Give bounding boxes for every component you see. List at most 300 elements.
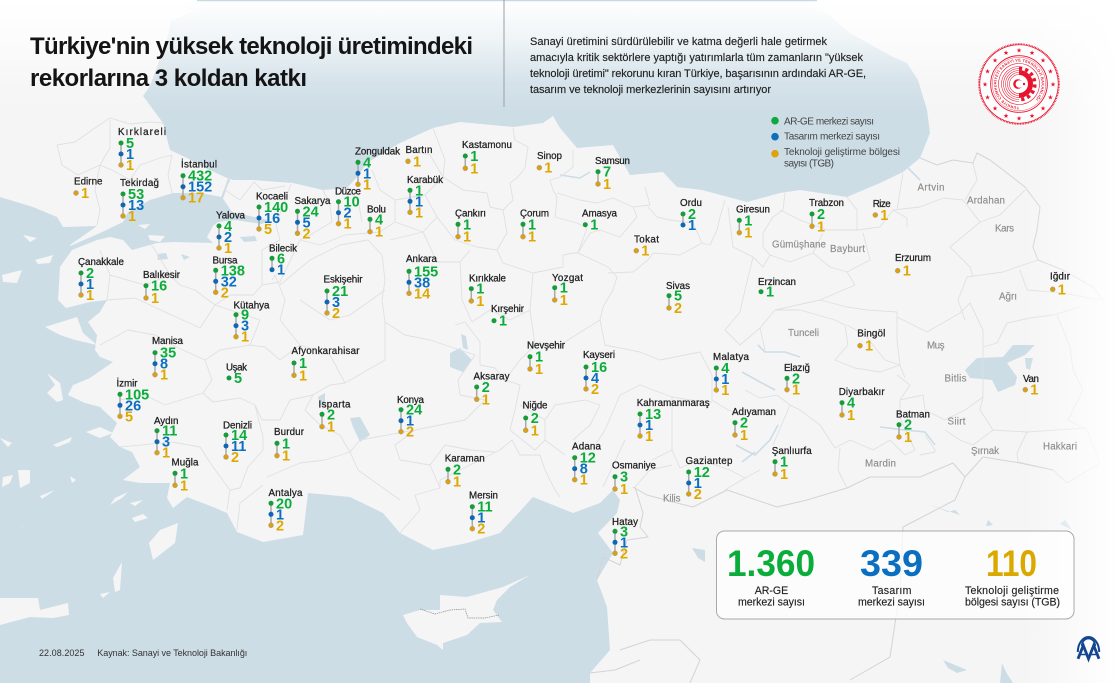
province: Burdur: 1 — [282, 436, 290, 452]
province: Bilecik: Bilecik — [269, 244, 297, 254]
province: Samsun: Samsun — [595, 156, 630, 167]
legend: AR-GE merkezi sayısı — [784, 116, 874, 128]
province: Tokat: Tokat — [634, 234, 659, 246]
title: Türkiye'nin yüksek teknoloji üretimindeki — [30, 33, 473, 60]
intro text: Sanayi üretimini sürdürülebilir ve katma değerli hale getirmek — [530, 36, 828, 48]
province: Karabük — [407, 175, 443, 221]
total: TGB — [965, 543, 1060, 608]
province: Isparta: 1 — [327, 420, 335, 436]
province: Hatay: 1 — [620, 535, 628, 551]
ministry seal: ★ — [1029, 49, 1035, 57]
province: Zonguldak: 4 — [363, 155, 371, 171]
province: Balıkesir: Balıkesir — [143, 270, 181, 281]
province: Trabzon — [809, 198, 844, 235]
province: Kahramanmaraş: 1 — [645, 429, 653, 445]
province: Aydın — [154, 416, 178, 462]
province: Yalova: Yalova — [216, 210, 246, 222]
province: İzmir: 26 — [125, 398, 141, 414]
province: Karabük: 1 — [415, 194, 423, 210]
total: AR-GE: AR-GE — [755, 585, 788, 597]
province: Kırklareli: 5 — [126, 136, 134, 152]
province: Eskişehir: 21 — [332, 284, 348, 300]
province: İzmir: 105 — [125, 387, 149, 403]
province: Rize — [873, 199, 891, 224]
province: Osmaniye: Osmaniye — [612, 460, 657, 472]
province: Düzce: 1 — [344, 217, 352, 233]
province: Samsun: 1 — [603, 177, 611, 193]
province: Tekirdağ: Tekirdağ — [120, 178, 159, 189]
province: Zonguldak — [355, 146, 400, 193]
province: Eskişehir: 3 — [332, 295, 340, 311]
date and source: Kaynak: Sanayi ve Teknoloji Bakanlığı — [97, 648, 247, 658]
ministry seal: ★ — [992, 56, 998, 64]
province: Şanlıurfa: 1 — [780, 455, 788, 471]
province: Edirne: Edirne — [74, 176, 103, 188]
legend: sayısı (TGB) — [784, 158, 834, 170]
province: Erzurum: Erzurum — [895, 253, 931, 264]
province: Kocaeli: 16 — [264, 211, 280, 227]
province: Kocaeli: Kocaeli — [256, 192, 288, 202]
province: Muğla: Muğla — [172, 458, 199, 468]
province: Kahramanmaraş: Kahramanmaraş — [637, 398, 710, 409]
province: Tokat: 1 — [641, 244, 649, 260]
province: Bursa: 2 — [221, 285, 229, 301]
total: AR-GE — [727, 543, 815, 608]
province: Kütahya: 3 — [241, 319, 249, 335]
province: Uşak: 5 — [234, 371, 242, 387]
province: Sakarya: 5 — [302, 215, 311, 231]
legend: Teknoloji geliştirme bölgesi — [784, 147, 900, 158]
province: Konya: Konya — [397, 395, 425, 406]
province: Samsun: 7 — [603, 165, 611, 181]
province: Adana: 1 — [580, 473, 588, 489]
province: Elazığ: Elazığ — [784, 363, 810, 374]
province: Tekirdağ: 1 — [128, 209, 136, 225]
province: Afyonkarahisar — [292, 346, 360, 384]
province: Uşak — [226, 362, 247, 387]
legend: Tasarım merkezi sayısı — [784, 132, 880, 142]
province: Elazığ — [784, 363, 810, 399]
province: Denizli: 2 — [231, 450, 239, 466]
province: Ankara: 14 — [414, 286, 430, 302]
province: Iğdır: Iğdır — [1050, 272, 1071, 282]
province: Çanakkale: 1 — [86, 277, 94, 293]
province: Kahramanmaraş — [637, 398, 710, 445]
province: Yalova: 2 — [224, 230, 232, 246]
province: Çorum: Çorum — [520, 208, 549, 220]
intro text: tasarım ve teknoloji merkezlerinin sayısını artırıyor — [530, 84, 771, 96]
province: Kocaeli: 5 — [264, 222, 272, 238]
total: AR-GE: merkezi sayısı — [738, 596, 805, 608]
ministry seal: ★ — [1047, 94, 1053, 102]
province: Bilecik: 1 — [277, 263, 285, 279]
province: Bursa: 32 — [221, 274, 237, 290]
province: İstanbul — [180, 160, 217, 207]
province: Bilecik: 6 — [277, 251, 285, 267]
province: Kahramanmaraş: 13 — [645, 407, 661, 423]
ministry seal: ★ — [985, 68, 991, 76]
province: Zonguldak: Zonguldak — [355, 146, 400, 158]
province: Edirne — [74, 176, 103, 202]
province: Iğdır — [1050, 272, 1071, 298]
province: Kayseri: 2 — [591, 382, 599, 398]
province: Ankara: 155 — [414, 264, 438, 280]
province: Çankırı — [455, 208, 486, 246]
icon: AA logo — [1078, 637, 1099, 659]
province: Düzce: 10 — [344, 195, 360, 211]
provinces without data: Kars — [995, 224, 1014, 234]
province: Konya: 1 — [406, 414, 414, 430]
province: Manisa — [152, 336, 184, 384]
province: Osmaniye: 3 — [620, 470, 628, 486]
province: Nevşehir — [527, 340, 566, 378]
province: Bolu: 4 — [375, 212, 383, 228]
province: Zonguldak: 1 — [363, 177, 371, 193]
province: Bursa — [212, 256, 245, 301]
lakes and rivers — [157, 236, 1072, 683]
province: Sakarya: 24 — [302, 204, 319, 220]
total: Tasarım: merkezi sayısı — [858, 596, 925, 608]
province: Karabük: Karabük — [407, 175, 443, 186]
title — [30, 33, 473, 92]
province: Mersin: 1 — [477, 511, 485, 527]
province: Hatay: 2 — [620, 546, 628, 562]
province: Kütahya: 1 — [241, 330, 249, 346]
province: Çanakkale — [78, 257, 125, 304]
province: Kayseri — [583, 350, 615, 398]
province: Mersin — [469, 490, 498, 538]
province: Balıkesir — [143, 270, 181, 307]
provinces without data: Hakkari — [1043, 442, 1077, 452]
ministry seal: ★ — [1003, 49, 1009, 57]
province: Ankara — [406, 254, 438, 302]
province: Karaman: Karaman — [445, 454, 485, 464]
province: Antalya: 20 — [276, 496, 292, 512]
province: Balıkesir: 16 — [151, 279, 167, 295]
province: Bolu — [367, 204, 386, 241]
provinces without data: Şırnak — [971, 446, 999, 457]
province: Kastamonu — [462, 140, 512, 177]
province: Erzurum: 1 — [903, 264, 911, 280]
total: TGB: Teknoloji geliştirme — [965, 585, 1059, 597]
province: Ordu: 2 — [688, 207, 696, 223]
province: Batman — [896, 410, 930, 446]
province: Bolu: 1 — [375, 225, 383, 241]
province: Antalya — [268, 488, 303, 534]
province: Yozgat: 1 — [560, 281, 568, 297]
province: Amasya: 1 — [590, 218, 598, 234]
province: Malatya: 1 — [721, 372, 729, 388]
province: Yalova: 4 — [224, 219, 232, 235]
province: Eskişehir: Eskişehir — [324, 274, 363, 286]
province: Amasya — [582, 208, 618, 234]
province: Erzincan — [758, 277, 796, 301]
province: Elazığ: 1 — [792, 383, 800, 399]
province: Kayseri: 16 — [591, 360, 607, 376]
province: Karaman: 1 — [453, 475, 461, 491]
province: İstanbul: İstanbul — [181, 160, 217, 170]
total: Tasarım: Tasarım — [872, 585, 912, 597]
province: Eskişehir: 2 — [332, 306, 340, 322]
province: Afyonkarahisar: 1 — [299, 356, 307, 372]
header divider — [503, 0, 505, 107]
province: Bingöl — [857, 328, 885, 355]
province: Bursa: 138 — [221, 263, 245, 279]
province: Nevşehir: 1 — [535, 350, 543, 366]
province: Bartın: 1 — [413, 154, 421, 170]
islands — [0, 224, 530, 650]
title: rekorlarına 3 koldan katkı — [30, 65, 307, 92]
province: Kütahya: 9 — [241, 308, 249, 324]
province: Adana: 12 — [580, 451, 596, 467]
province: Düzce — [335, 186, 362, 233]
province: Ordu — [680, 198, 702, 234]
province: Elazığ: 2 — [792, 371, 800, 387]
provinces without data: Bayburt — [830, 244, 865, 255]
province: Mersin: 11 — [477, 500, 493, 516]
province: Aydın: 1 — [162, 446, 170, 462]
province: Çankırı: Çankırı — [455, 208, 486, 220]
province: Ordu: 1 — [688, 218, 696, 234]
province: Gaziantep: 1 — [694, 476, 702, 492]
province: Kocaeli — [256, 192, 288, 238]
provinces without data: Mardin — [865, 458, 896, 470]
province: Afyonkarahisar: 1 — [299, 368, 307, 384]
provinces without data: Tunceli — [788, 328, 819, 339]
province: Muğla: 1 — [180, 466, 188, 482]
province: Trabzon: 2 — [817, 207, 825, 223]
province: Sivas: 2 — [674, 301, 682, 317]
ministry seal: ★ — [982, 80, 988, 88]
province: Aydın: 11 — [162, 424, 177, 440]
province: Sivas — [666, 281, 690, 317]
province: Yalova — [216, 210, 246, 257]
ministry seal: ★ — [985, 94, 991, 102]
province: Bolu: Bolu — [367, 204, 386, 216]
province: Malatya — [713, 352, 750, 399]
province: Kastamonu: 1 — [470, 161, 478, 177]
province: Burdur: Burdur — [274, 427, 305, 438]
province: Sivas: Sivas — [666, 281, 690, 292]
province: İzmir — [116, 378, 149, 425]
province: Düzce: 2 — [344, 206, 352, 222]
province: Van — [1023, 374, 1039, 399]
province: Sakarya: Sakarya — [294, 196, 331, 207]
province: Kırklareli: Kırklareli — [118, 127, 166, 138]
province: Manisa: Manisa — [152, 336, 184, 347]
ministry seal — [978, 43, 1060, 125]
province: Ankara: 38 — [414, 275, 430, 291]
totals panel — [716, 531, 1074, 619]
province: Denizli: Denizli — [223, 420, 252, 432]
province: Isparta — [318, 400, 351, 436]
province: Sinop: Sinop — [537, 151, 563, 162]
province: Gaziantep: Gaziantep — [686, 456, 733, 467]
province: Kırıkkale: 1 — [476, 282, 484, 298]
province: Kırıkkale: 1 — [476, 294, 484, 310]
province: Kütahya — [234, 300, 270, 346]
province: Yozgat: Yozgat — [552, 273, 583, 284]
province: Osmaniye: 1 — [620, 482, 628, 498]
total: TGB: 110 — [986, 543, 1037, 584]
province: Amasya: Amasya — [582, 208, 618, 220]
province: Niğde: 2 — [531, 411, 539, 427]
province: Muğla — [172, 458, 199, 494]
province: Gaziantep: 2 — [694, 487, 702, 503]
province: Samsun — [595, 156, 630, 193]
provinces without data — [663, 182, 1077, 504]
province: Isparta: Isparta — [318, 400, 351, 410]
province: İstanbul: 432 — [188, 169, 212, 185]
province: Malatya: Malatya — [713, 352, 750, 363]
province: Tekirdağ — [120, 178, 159, 225]
province: Aksaray: 1 — [482, 392, 490, 408]
province: Yozgat: 1 — [560, 293, 568, 309]
province: Antalya: 1 — [276, 507, 284, 523]
sea: Aegean and Mediterranean — [0, 197, 620, 683]
province and country borders — [57, 118, 1100, 533]
province: Giresun: 1 — [744, 213, 752, 229]
province: Burdur — [274, 427, 305, 465]
province: Şanlıurfa: Şanlıurfa — [772, 446, 812, 457]
province: Diyarbakır: Diyarbakır — [839, 387, 885, 398]
sea: Marmara — [68, 193, 268, 250]
province: Mersin: Mersin — [469, 490, 498, 502]
province: Hatay: 3 — [620, 524, 628, 540]
province: Hatay: Hatay — [612, 517, 638, 528]
province: Konya: 2 — [406, 425, 414, 441]
province: Yozgat — [552, 273, 583, 309]
sea: Black Sea — [143, 0, 930, 202]
province: Trabzon: 1 — [817, 219, 825, 235]
province: Karaman: 2 — [453, 462, 461, 478]
ministry seal: TÜRKİYE CUMHURİYETİ SANAYİ VE TEKNOLOJİ BAKANLIĞI — [994, 58, 1044, 110]
province: İzmir: İzmir — [116, 378, 138, 390]
province: Kahramanmaraş: 1 — [645, 418, 653, 434]
province: Aksaray: 2 — [482, 380, 490, 396]
province: Niğde: 1 — [531, 423, 539, 439]
province: Bartın — [406, 145, 432, 170]
province: Mersin: 2 — [477, 522, 485, 538]
province: Kastamonu: 1 — [470, 149, 478, 165]
provinces without data: Bitlis — [944, 374, 967, 384]
province: Niğde — [522, 400, 548, 439]
province: Uşak: Uşak — [226, 362, 247, 374]
provinces without data: Siirt — [948, 416, 966, 428]
provinces without data: Artvin — [918, 182, 944, 194]
province: Manisa: 1 — [160, 368, 168, 384]
province: Ordu: Ordu — [680, 198, 702, 209]
provinces without data: Ağrı — [999, 292, 1017, 302]
province: Çanakkale: 2 — [86, 266, 94, 282]
province: Çorum — [520, 208, 549, 246]
province: Aksaray — [474, 372, 510, 408]
province: Sakarya: 2 — [302, 226, 311, 242]
ministry seal: ★ — [1040, 56, 1046, 64]
province: Diyarbakır: 1 — [847, 408, 855, 424]
province: Nevşehir: Nevşehir — [527, 340, 566, 352]
ministry seal: ★ — [1016, 46, 1022, 54]
province: Kırşehir — [491, 304, 525, 330]
province: İstanbul: 152 — [188, 180, 212, 196]
province: Çankırı: 1 — [463, 230, 471, 246]
province: Karaman — [445, 454, 485, 491]
province: Aydın: 3 — [162, 435, 170, 451]
province: Hatay — [612, 517, 638, 562]
province: Düzce: Düzce — [335, 186, 362, 198]
province: Çanakkale: Çanakkale — [78, 257, 125, 268]
province: Tekirdağ: 13 — [128, 198, 144, 214]
province: Karabük: 1 — [415, 205, 423, 221]
province: Bilecik — [269, 244, 297, 279]
province: Konya — [397, 395, 425, 441]
province: Balıkesir: 1 — [151, 291, 159, 307]
province: Muğla: 1 — [180, 478, 188, 494]
ministry seal: ★ — [1047, 68, 1053, 76]
province: Sakarya — [294, 196, 331, 242]
province: Batman: Batman — [896, 410, 930, 420]
province: Osmaniye — [612, 460, 657, 498]
province: Gaziantep — [686, 456, 733, 503]
intro text: amacıyla kritik sektörlere yaptığı yatırımlarla tüm zamanların "yüksek — [530, 52, 864, 64]
province: Isparta: 2 — [327, 407, 335, 423]
province: Erzincan: Erzincan — [758, 277, 796, 288]
province: Burdur: 1 — [282, 449, 290, 465]
province: Van: 1 — [1030, 383, 1038, 399]
province: Giresun: 1 — [744, 226, 752, 242]
province: Giresun — [736, 204, 770, 242]
province: Konya: 24 — [406, 403, 422, 419]
province: Çankırı: 1 — [463, 217, 471, 233]
province: Kırıkkale — [469, 274, 507, 310]
province: Denizli: 11 — [231, 439, 246, 455]
ministry seal: ★ — [992, 104, 998, 112]
province: Bursa: Bursa — [212, 256, 238, 266]
top and right white fades — [0, 0, 1120, 112]
province: Batman: 2 — [904, 418, 912, 434]
intro text — [530, 36, 866, 96]
total: TGB: bölgesi sayısı (TGB) — [965, 596, 1060, 608]
province: Karabük: 1 — [415, 183, 423, 199]
province: Afyonkarahisar: Afyonkarahisar — [292, 346, 360, 357]
province: Kayseri: 4 — [591, 371, 599, 387]
province: Tokat — [634, 234, 659, 260]
province: Bingöl: Bingöl — [857, 328, 885, 340]
province: Eskişehir — [324, 274, 363, 322]
province: Trabzon: Trabzon — [809, 198, 844, 209]
province: Zonguldak: 1 — [363, 166, 371, 182]
province: Manisa: 8 — [160, 357, 168, 373]
province: Erzurum — [895, 253, 931, 280]
ministry seal: ★ — [1003, 112, 1009, 120]
province: Giresun: Giresun — [736, 204, 770, 216]
province: Rize: 1 — [880, 208, 888, 224]
province: Bartın: Bartın — [406, 145, 432, 156]
province: Kayseri: Kayseri — [583, 350, 615, 361]
province: Diyarbakır: 4 — [847, 396, 855, 412]
province: Adıyaman: 2 — [740, 416, 748, 432]
province: Kastamonu: Kastamonu — [462, 140, 512, 151]
province: Malatya: 4 — [721, 361, 729, 377]
province: Kırıkkale: Kırıkkale — [469, 274, 507, 284]
province: Adana: 8 — [580, 462, 588, 478]
total: Tasarım: 339 — [860, 543, 923, 584]
province: Çanakkale: 1 — [86, 288, 94, 304]
province: Sivas: 5 — [674, 289, 682, 305]
province: Aydın: Aydın — [154, 416, 178, 427]
province: Gaziantep: 12 — [694, 465, 710, 481]
province: Yalova: 1 — [224, 241, 232, 257]
